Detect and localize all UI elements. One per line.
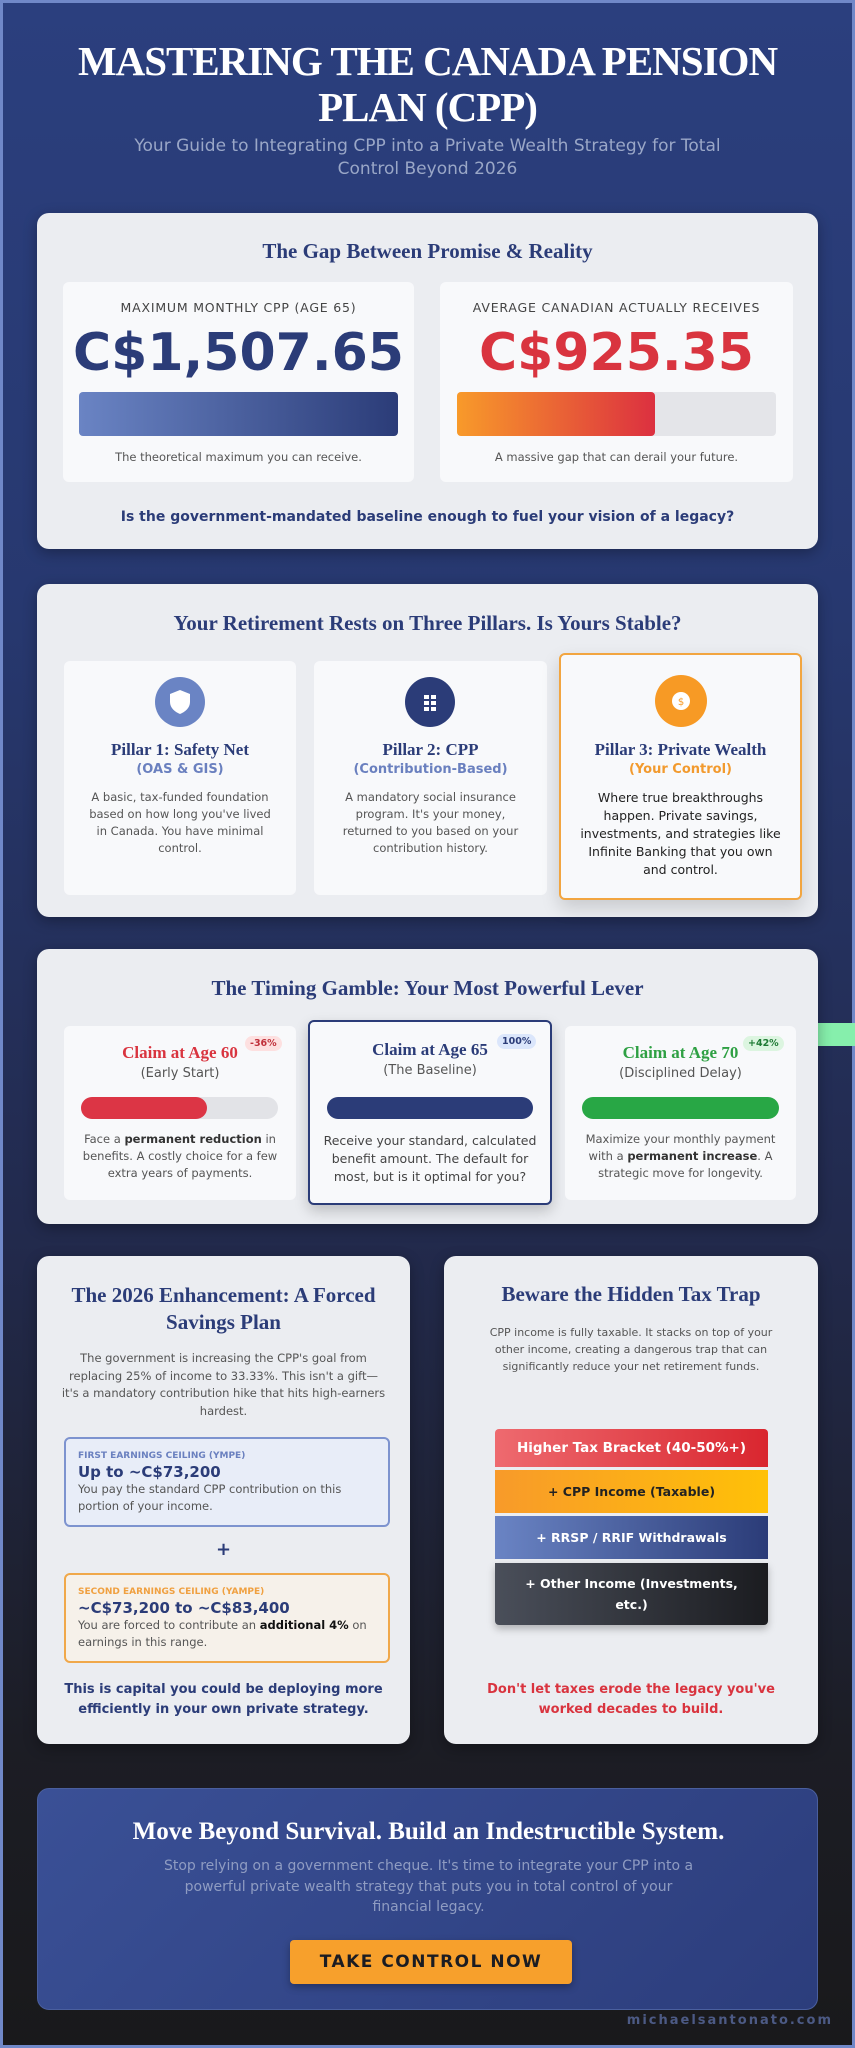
- stack chart: Higher Tax Bracket (40-50%+): [517, 1440, 746, 1456]
- panel: timing: [37, 949, 818, 1224]
- stack chart: + Other Income (Investments,: [525, 1576, 738, 1591]
- stack chart: + RRSP / RRIF Withdrawals: [536, 1530, 727, 1545]
- card: age 70: Maximize your monthly payment with a permanent increase. A strategic move for longevity.: [586, 1132, 775, 1180]
- heading: pillars: Your Retirement Rests on Three Pillars. Is Yours Stable?: [173, 611, 682, 635]
- pillar 3: [559, 653, 802, 900]
- number: max: C$1,507.65: [73, 323, 404, 383]
- pillar 2: Pillar 2: CPP: [382, 740, 478, 759]
- decoration: green tab: [796, 1023, 855, 1046]
- card: age 65: Receive your standard, calculated benefit amount. The default for most, but is it optimal for you?: [324, 1133, 536, 1184]
- watermark: michaelsantonato.com: [627, 2013, 833, 2028]
- pillar 3: (Your Control): [629, 762, 732, 777]
- card: age 65: [308, 1020, 552, 1205]
- bar: 60: [81, 1097, 278, 1119]
- badge: 100%: [502, 1036, 531, 1047]
- bar: 65: [327, 1097, 533, 1119]
- card: average: [440, 282, 793, 482]
- card: maximum: [63, 282, 414, 482]
- pillar 3: Pillar 3: Private Wealth: [595, 740, 766, 759]
- question: Is the government-mandated baseline enough to fuel your vision of a legacy?: [121, 509, 734, 525]
- pillar 3: Where true breakthroughs happen. Private savings, investments, and strategies like Infinite Banking that you own and control.: [580, 790, 781, 877]
- card: age 70: (Disciplined Delay): [619, 1066, 742, 1081]
- stack chart: [491, 1429, 772, 1633]
- stack chart: etc.): [615, 1597, 648, 1612]
- icon: shield: [155, 677, 205, 727]
- card: age 60: Claim at Age 60: [122, 1043, 238, 1062]
- card: age 70: [565, 1026, 796, 1200]
- box: YAMPE: ~C$73,200 to ~C$83,400: [78, 1599, 290, 1617]
- subtitle: Your Guide to Integrating CPP into a Private Wealth Strategy for Total Control Beyond 2026: [134, 136, 721, 179]
- pillar 2: (Contribution-Based): [353, 762, 508, 777]
- badge: [497, 1034, 536, 1049]
- pillar 1: Pillar 1: Safety Net: [111, 740, 249, 759]
- card: age 65: Claim at Age 65: [372, 1040, 488, 1059]
- card: maximum: The theoretical maximum you can receive.: [115, 450, 362, 464]
- badge: -36%: [250, 1038, 277, 1049]
- card: average: AVERAGE CANADIAN ACTUALLY RECEIVES: [473, 300, 760, 315]
- bar: max: [79, 392, 398, 436]
- icon: coin: $: [678, 697, 684, 708]
- heading: timing: The Timing Gamble: Your Most Powerful Lever: [211, 976, 644, 1000]
- button: [290, 1940, 572, 1984]
- heading: tax: Beware the Hidden Tax Trap: [501, 1282, 761, 1306]
- text: CTA: financial legacy.: [372, 1899, 485, 1915]
- card: age 65: (The Baseline): [383, 1063, 477, 1078]
- pillar 1: [64, 661, 296, 895]
- panel: tax trap: [444, 1256, 818, 1744]
- badge: +42%: [748, 1038, 779, 1049]
- pillar 1: (OAS & GIS): [136, 762, 224, 777]
- number: average: C$925.35: [479, 323, 754, 383]
- plus: +: [216, 1539, 231, 1560]
- card: average: A massive gap that can derail your future.: [495, 450, 738, 464]
- panel: pillars: [37, 584, 818, 917]
- title: MASTERING THE CANADA PENSION: [78, 38, 777, 84]
- text: CTA: Stop relying on a government cheque. It's time to integrate your CPP into a powerful private wealth strategy that puts you in total control of your: [164, 1858, 693, 1894]
- heading: gap: The Gap Between Promise & Reality: [262, 239, 593, 263]
- bar: average: [457, 392, 776, 436]
- pillar 2: A mandatory social insurance program. It's your money, returned to you based on your contribution history.: [343, 790, 518, 855]
- pillar 1: A basic, tax-funded foundation based on how long you've lived in Canada. You have minimal control.: [89, 790, 271, 855]
- card: age 70: Claim at Age 70: [623, 1043, 738, 1062]
- card: age 60: (Early Start): [141, 1066, 219, 1081]
- box: YAMPE: SECOND EARNINGS CEILING (YAMPE): [78, 1587, 264, 1597]
- warning: Don't let taxes erode the legacy you've worked decades to build.: [487, 1682, 775, 1717]
- box: YAMPE: [64, 1573, 390, 1663]
- box: YMPE: Up to ~C$73,200: [78, 1463, 221, 1481]
- card: age 60: Face a permanent reduction in benefits. A costly choice for a few extra years of payments.: [83, 1132, 277, 1180]
- icon: grid: [405, 677, 455, 727]
- stack chart: + CPP Income (Taxable): [548, 1484, 715, 1499]
- text: enhancement: The government is increasing the CPP's goal from replacing 25% of income to 33.33%. This isn't a gift—it's a mandatory contribution hike that hits high-earners hardest.: [62, 1351, 385, 1418]
- box: YMPE: You pay the standard CPP contribution on this portion of your income.: [78, 1482, 341, 1513]
- icon: coin: [655, 675, 707, 727]
- panel: enhancement: [37, 1256, 410, 1744]
- box: YMPE: FIRST EARNINGS CEILING (YMPE): [78, 1451, 245, 1461]
- heading: CTA: Move Beyond Survival. Build an Indestructible System.: [133, 1818, 724, 1845]
- title: PLAN (CPP): [318, 84, 537, 130]
- conclusion: This is capital you could be deploying more efficiently in your own private strategy.: [64, 1682, 383, 1717]
- bar: 70: [582, 1097, 779, 1119]
- panel: CTA: [37, 1788, 818, 2010]
- box: YAMPE: You are forced to contribute an additional 4% on earnings in this range.: [78, 1618, 367, 1649]
- badge: [743, 1036, 784, 1051]
- pillar 2: [314, 661, 547, 895]
- button: TAKE CONTROL NOW: [320, 1952, 542, 1972]
- title: [78, 38, 778, 130]
- card: maximum: MAXIMUM MONTHLY CPP (AGE 65): [121, 300, 356, 315]
- card: age 60: [64, 1026, 296, 1200]
- box: YMPE: [64, 1437, 390, 1527]
- text: CTA: [164, 1858, 693, 1915]
- panel: gap: [37, 213, 818, 549]
- heading: enhancement: The 2026 Enhancement: A Forced Savings Plan: [71, 1283, 376, 1334]
- badge: [245, 1036, 282, 1051]
- text: tax: CPP income is fully taxable. It stacks on top of your other income, creating a dangerous trap that can significantly reduce your net retirement funds.: [490, 1326, 772, 1373]
